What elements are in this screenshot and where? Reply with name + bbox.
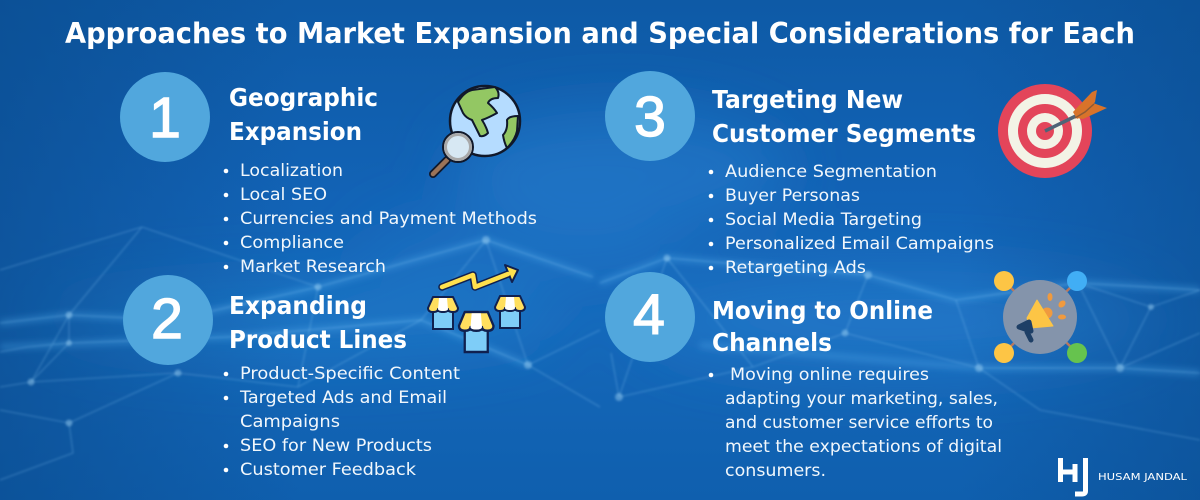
logo: Husam Jandal: HUSAM JANDAL <box>1098 472 1187 483</box>
text block: meet the expectations of digital <box>725 437 1002 457</box>
bullet list <box>224 364 460 480</box>
number badge 4 <box>605 272 695 362</box>
heading: expanding product lines <box>229 291 407 354</box>
bullet list: Buyer Personas <box>725 186 860 206</box>
heading: targeting new customer segments: Customer Segments <box>712 119 976 148</box>
heading: targeting new customer segments: Targeting New <box>712 85 903 114</box>
bullet list: Social Media Targeting <box>725 210 922 230</box>
text block: consumers. <box>725 461 826 481</box>
heading: targeting new customer segments <box>712 85 976 148</box>
heading: moving to online channels <box>712 296 933 357</box>
icon: megaphone network <box>994 271 1087 363</box>
bullet list: Customer Feedback <box>240 460 416 480</box>
heading: geographic expansion: Geographic <box>229 83 378 112</box>
heading: geographic expansion: Expansion <box>229 117 362 146</box>
heading: moving to online channels: Channels <box>712 328 832 357</box>
text block: and customer service efforts to <box>725 413 993 433</box>
panel: targeting new customer segments <box>605 71 1107 278</box>
bullet list: SEO for New Products <box>240 436 432 456</box>
heading: expanding product lines: Expanding <box>229 291 367 320</box>
heading: expanding product lines: Product Lines <box>229 325 407 354</box>
text block <box>709 365 1002 481</box>
title: Approaches to Market Expansion and Special Considerations for Each <box>65 17 1135 50</box>
number badge 2: 2 <box>151 287 183 351</box>
icon: stores with rising arrow <box>428 265 525 352</box>
number badge 4: 4 <box>633 283 665 347</box>
panel: moving to online channels <box>605 271 1087 481</box>
number badge 3: 3 <box>634 85 666 149</box>
heading: geographic expansion <box>229 83 378 146</box>
bullet list: Local SEO <box>240 185 327 205</box>
bullet list: Compliance <box>240 233 344 253</box>
number badge 1 <box>120 72 210 162</box>
bullet list: Retargeting Ads <box>725 258 866 278</box>
bullet list: Personalized Email Campaigns <box>725 234 994 254</box>
icon: globe with magnifier <box>433 86 520 174</box>
logo: Husam Jandal <box>1060 458 1187 494</box>
bullet list: Campaigns <box>240 412 340 432</box>
number badge 3 <box>605 71 695 161</box>
bullet list <box>224 161 537 277</box>
bullet list: Targeted Ads and Email <box>239 388 447 408</box>
bullet list: Audience Segmentation <box>725 162 937 182</box>
panel: geographic expansion <box>120 72 537 277</box>
number badge 2 <box>123 275 213 365</box>
icon: target with arrow <box>998 84 1107 178</box>
heading: moving to online channels: Moving to Online <box>712 296 933 325</box>
number badge 1: 1 <box>149 86 181 150</box>
bullet list: Localization <box>240 161 343 181</box>
panel: expanding product lines <box>123 265 525 480</box>
bullet list <box>709 162 994 278</box>
bullet list: Market Research <box>240 257 386 277</box>
bullet list: Product-Specific Content <box>240 364 460 384</box>
bullet list: Currencies and Payment Methods <box>240 209 537 229</box>
text block: adapting your marketing, sales, <box>725 389 998 409</box>
text block: Moving online requires <box>730 365 929 385</box>
